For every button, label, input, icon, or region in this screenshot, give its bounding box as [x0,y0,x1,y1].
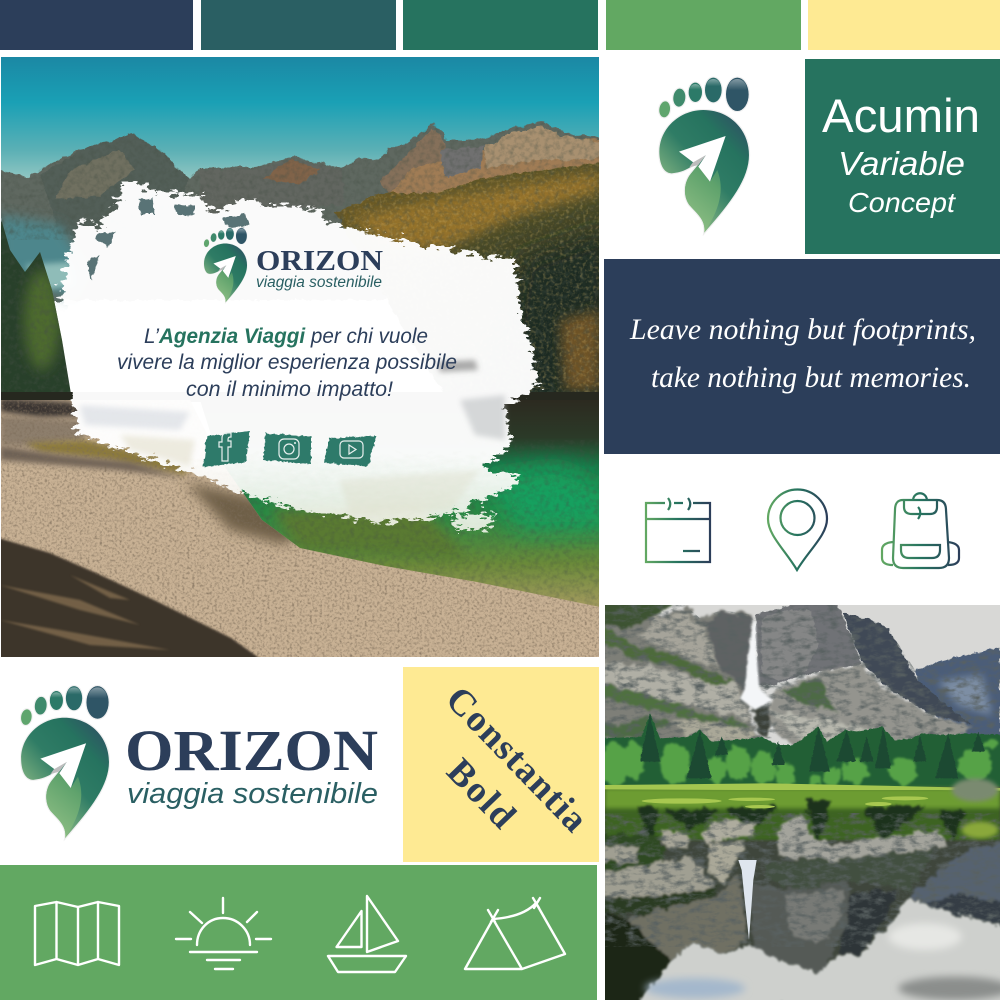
logo wordmark: large: ORIZON [125,718,378,783]
distant blue mountain [914,648,1000,736]
panel: waterfall photo [592,595,1000,1000]
panel: quote [604,259,1000,454]
icon: instagram [263,433,311,464]
panel: travel icons [0,865,597,1000]
reflected dome [750,812,1000,973]
logo mark: footprint [658,78,749,233]
icon: backpack [882,493,959,568]
forested slope [335,163,602,405]
cliff texture [605,605,1000,745]
typeface name: Constantia [438,679,596,840]
colour swatch: navy [0,0,193,50]
white brush stroke [61,180,538,530]
icon: folded map [35,902,119,965]
reflected trees [605,788,1000,840]
forest colour and texture [336,164,599,392]
icon row [646,490,959,570]
dark pines [640,713,985,778]
left cliffs [605,605,761,742]
quote text [629,313,976,394]
slogan text: L’Agenzia Viaggi per chi vuole [144,324,428,348]
waterfall [740,622,772,710]
icon: youtube [325,436,376,466]
reflection texture [605,813,1000,947]
icon: sailboat [328,896,406,972]
sky [657,605,1000,745]
typeface name: Concept [848,187,956,218]
colour swatch: leaf green [606,0,801,50]
logo wordmark: large [125,718,378,810]
tree shadow on the beach [0,537,262,660]
colour swatch: green teal [403,0,598,50]
small logo: wordmark: ORIZON [256,246,383,277]
icon: map pin [768,490,827,570]
teal haze below the left peak [0,215,90,300]
slogan text [117,324,457,401]
forest band [602,713,1000,788]
panel: Acumin typeface [805,59,1000,254]
sky [1,57,599,187]
typeface name: Acumin [822,89,980,142]
small logo: wordmark [256,251,383,290]
quote text: Leave nothing but footprints, [629,313,976,346]
water base [605,787,1000,1000]
typeface name: Bold [439,751,524,837]
typeface name [822,89,980,218]
slogan text: vivere la miglior esperienza possibile [117,350,457,374]
left pine trees [1,222,71,392]
upper scene: cliffs and forest [592,595,1000,788]
colour swatch: deep teal [201,0,396,50]
mountain showing through the brush top [85,198,250,280]
quote text: take nothing but memories. [651,361,971,394]
meadow strip [605,783,1000,791]
floating grass [642,796,928,808]
logo wordmark: large: viaggia sostenibile [127,778,378,810]
green lake [224,402,599,607]
typeface name: Variable [838,145,965,182]
grey wash patches inside the brush [80,360,505,515]
shoreline tree band behind beach [1,392,599,400]
icon: sunset [176,898,271,969]
icon: facebook [203,431,250,467]
panel: Constantia typeface [403,667,599,862]
waterfall reflection [738,860,757,940]
sand beach [0,395,600,660]
icon: calendar [646,498,710,562]
mountains [0,122,602,300]
logo mark: footprint large [20,686,109,838]
talus below the dome [752,665,972,752]
left reflected rocks [595,820,755,1000]
colour swatch: pale yellow [808,0,1000,50]
panel: lake and mountain photo with brush overlay [0,57,610,660]
reflected sky [637,900,1000,1000]
mountain texture [1,123,599,240]
bare bush [952,778,998,802]
dappled light in the shadow [0,575,170,650]
small logo: footprint mark [203,228,247,302]
bright deciduous trees [600,738,998,787]
slogan text: con il minimo impatto! [186,377,393,401]
small logo: wordmark: viaggia sostenibile [256,274,382,291]
central granite dome [756,598,972,725]
lower scene: reflection in the water [595,778,1000,1000]
icon: tent [465,898,565,969]
